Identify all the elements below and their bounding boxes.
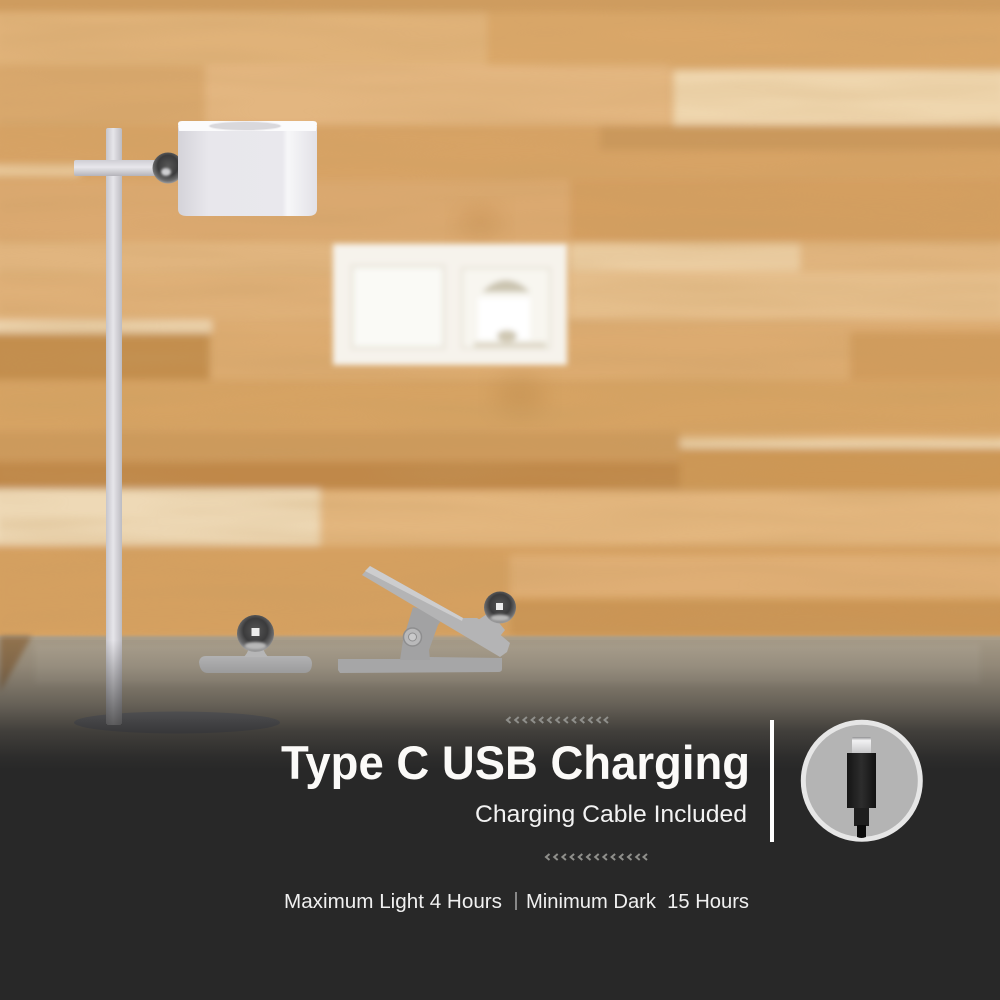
lamp cross arm xyxy=(74,160,164,176)
clip leg xyxy=(400,607,445,660)
separator xyxy=(516,892,517,910)
chevron divider top xyxy=(507,717,608,723)
clip lower base xyxy=(338,657,502,673)
subheading: Charging Cable Included xyxy=(475,801,747,828)
lamp ball joint xyxy=(152,152,184,184)
wall socket plate xyxy=(333,244,567,365)
vertical divider xyxy=(770,720,774,842)
icon: USB-C cable xyxy=(803,722,920,839)
chrome ball xyxy=(237,615,274,652)
battery life: minimum dark: Minimum Dark 15 Hours xyxy=(526,891,749,913)
table surface and dark fade xyxy=(0,636,1000,1000)
lamp pole xyxy=(106,128,122,725)
clip neck xyxy=(478,612,505,640)
chevron divider bottom xyxy=(546,854,647,860)
clip arm xyxy=(362,566,510,657)
lamp base xyxy=(74,712,280,734)
lamp head xyxy=(178,121,317,216)
heading: Type C USB Charging xyxy=(281,736,750,789)
chrome ball xyxy=(484,592,516,624)
clip mount xyxy=(338,566,516,673)
lamp xyxy=(74,121,317,734)
magnetic ball mount xyxy=(199,615,312,673)
clip pivot bolt xyxy=(404,628,422,646)
wood wall background xyxy=(0,0,1000,700)
battery life: maximum light: Maximum Light 4 Hours xyxy=(284,891,502,913)
